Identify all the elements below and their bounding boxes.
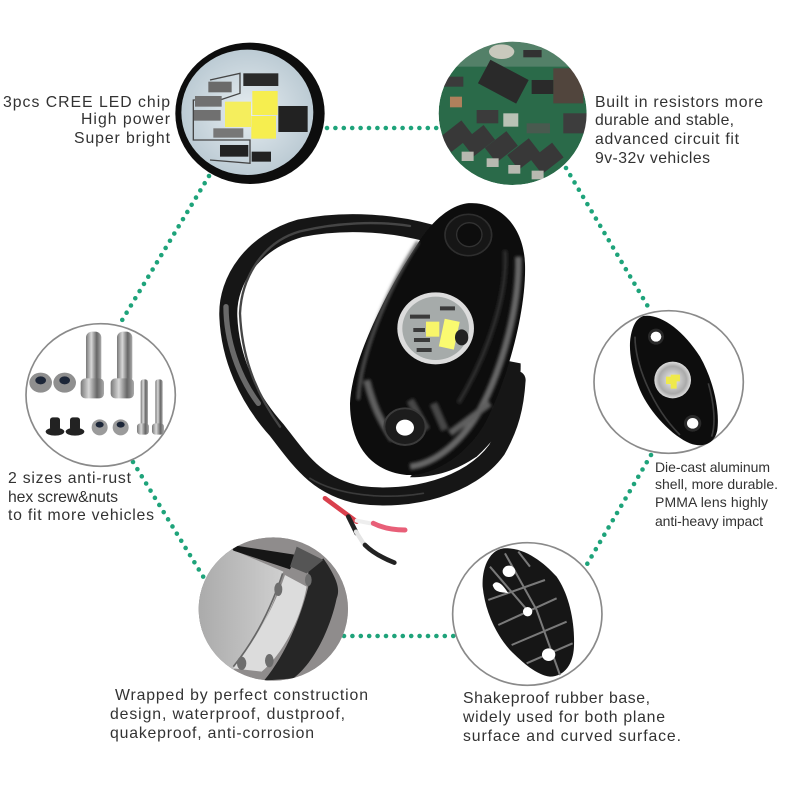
connector: lower left <box>133 462 204 578</box>
caption: resistors: 9v-32v vehicles <box>595 150 710 167</box>
large chip <box>478 60 529 104</box>
circle outline <box>594 311 743 453</box>
black base <box>483 548 574 677</box>
caption: screws: 2 sizes anti-rust <box>8 470 132 487</box>
large bolts <box>81 332 134 398</box>
shell highlights <box>358 242 518 467</box>
caption: screws <box>8 470 154 524</box>
caption: aluminum shell: anti-heavy impact <box>655 513 763 529</box>
caption: rubber base: widely used for both plane <box>462 709 665 726</box>
circle photo: LED chip close-up <box>175 43 325 184</box>
yellow LED chips <box>225 91 278 139</box>
caption: LED chip <box>3 94 171 147</box>
caption: aluminum shell <box>655 459 778 529</box>
caption: construction: quakeproof, anti-corrosion <box>110 725 314 742</box>
LED lens <box>397 292 474 364</box>
caption: screws: hex screw&nuts <box>8 489 118 506</box>
connector: upper right <box>566 168 650 310</box>
caption: aluminum shell: Die-cast aluminum <box>655 459 770 475</box>
rubber base shadow <box>410 360 521 477</box>
caption: resistors: advanced circuit fit <box>595 131 740 148</box>
dotted connector lines <box>121 128 651 636</box>
caption: construction: design, waterproof, dustproof, <box>110 706 345 723</box>
text blocks <box>3 94 778 745</box>
metal shell <box>350 203 525 475</box>
caption: LED chip: Super bright <box>74 130 171 147</box>
caption: aluminum shell: PMMA lens highly <box>655 494 768 510</box>
caption: construction <box>110 687 368 742</box>
caption: resistors: durable and stable, <box>595 112 734 129</box>
row of black capacitors <box>440 120 564 174</box>
caption: resistors <box>595 94 763 167</box>
rivets <box>237 574 312 670</box>
caption: rubber base: surface and curved surface. <box>463 728 681 745</box>
connector: lower right <box>586 455 651 566</box>
caption: LED chip: 3pcs CREE LED chip <box>3 94 170 111</box>
circle photo: circuit board <box>437 37 590 185</box>
connector: bottom <box>344 634 456 638</box>
caption: screws: to fit more vehicles <box>8 507 154 524</box>
caption: rubber base <box>462 690 681 745</box>
mounting holes <box>648 329 701 432</box>
circle outline <box>26 324 175 466</box>
top screw recess <box>445 214 492 256</box>
connector: upper left <box>121 176 209 322</box>
circle photo: rubber base <box>453 543 602 685</box>
chip outlines and components <box>193 73 308 163</box>
bottom screw hole <box>384 408 426 445</box>
large nuts <box>29 373 76 393</box>
small nuts <box>92 419 129 435</box>
thin bolts <box>137 379 164 435</box>
caption: resistors: Built in resistors more <box>595 94 763 111</box>
circle outline <box>453 543 602 685</box>
wire tails <box>325 498 405 563</box>
caption: rubber base: Shakeproof rubber base, <box>463 690 650 707</box>
caption: aluminum shell: shell, more durable. <box>655 476 778 492</box>
circle photo: screws and nuts <box>26 324 175 466</box>
center product: LED rock light with wire <box>226 203 525 563</box>
wire loop <box>226 223 517 497</box>
base holes <box>493 566 555 661</box>
black shell <box>630 316 718 445</box>
base ribs <box>488 552 573 675</box>
caption: construction: Wrapped by perfect construction <box>115 687 368 704</box>
caption: LED chip: High power <box>81 111 170 128</box>
connector: top <box>327 126 438 130</box>
black spacers <box>46 417 84 436</box>
lens <box>654 362 691 398</box>
circle photo: aluminum shell <box>594 311 743 453</box>
circle photo: waterproof seal <box>198 537 348 681</box>
